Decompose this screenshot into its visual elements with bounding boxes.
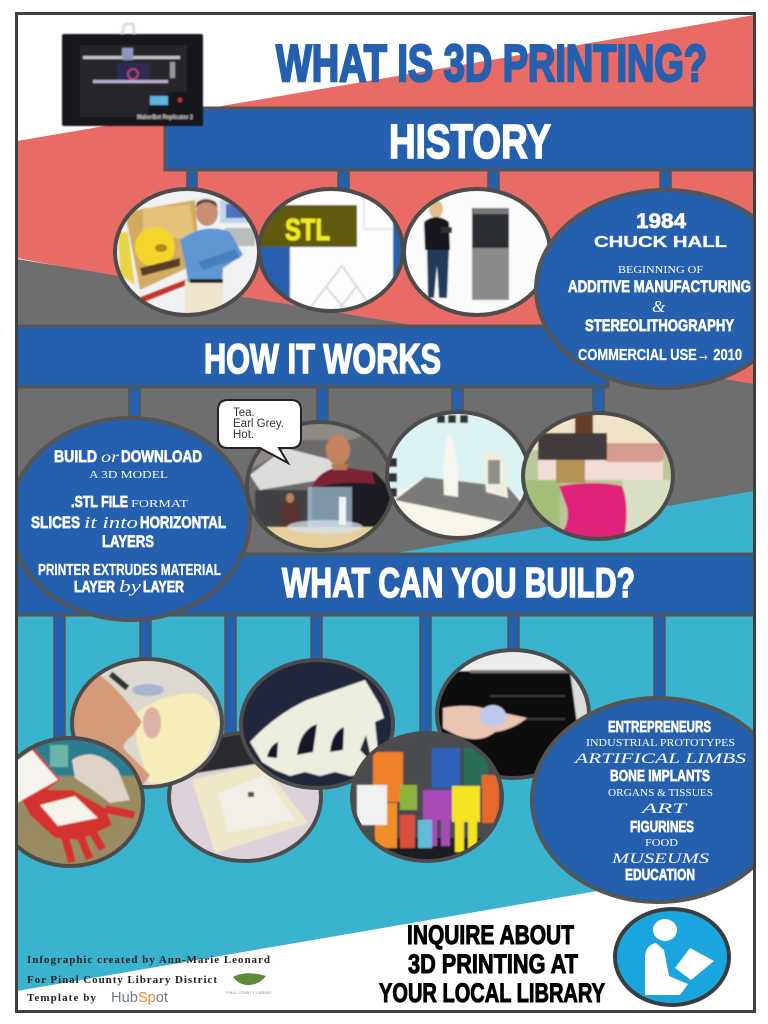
- text: layer by layer: LAYER: [143, 579, 184, 596]
- photo outline: [247, 422, 393, 550]
- panel: what can you build heading bar: [5, 554, 765, 615]
- text: stl file format: .STL FILE: [71, 494, 128, 511]
- year: 1984: [636, 210, 686, 233]
- name: CHUCK HALL: [594, 234, 727, 251]
- photo outline: [404, 189, 550, 315]
- text: stl file format: FORMAT: [131, 498, 188, 510]
- photo outline: [352, 733, 502, 861]
- list item: BONE IMPLANTS: [610, 768, 710, 785]
- photo outline: [259, 189, 403, 311]
- photo: Chuck Hull with printed part: [113, 187, 260, 317]
- text: stl file format: [72, 496, 188, 508]
- photo outline: [437, 650, 589, 778]
- credits: [27, 954, 270, 1006]
- icon: 3D printer photo: MakerBot Replicator 2: [137, 115, 194, 121]
- call to action: YOUR LOCAL LIBRARY: [379, 978, 605, 1008]
- heading: how it works: HOW IT WORKS: [204, 335, 441, 382]
- text: speech: Tea.: [233, 407, 255, 419]
- panel: what you can build list: [532, 698, 768, 902]
- photo: Captain Picard with replicator hologram: [245, 420, 400, 557]
- text: slices it into horizontal: [31, 516, 226, 528]
- photo outline: [241, 660, 393, 788]
- how it works connectors: [129, 387, 604, 425]
- text: beginning of: BEGINNING OF: [618, 264, 703, 276]
- text: speech: Hot.: [233, 429, 254, 441]
- call to action: INQUIRE ABOUT: [407, 920, 574, 950]
- photo outline: [169, 733, 321, 861]
- call to action: 3D PRINTING AT: [408, 949, 578, 979]
- text: layer by layer: LAYER: [74, 579, 115, 596]
- callout: speech bubble: [218, 400, 301, 463]
- credits: HubSpot: [111, 989, 169, 1006]
- photo: colourful printed robots: [350, 731, 506, 863]
- photo outline: [387, 412, 529, 538]
- text: build or download: [54, 450, 202, 462]
- text: layer by layer: by: [119, 577, 142, 596]
- icon: library reader: [615, 909, 729, 1005]
- photo: printed jaw bone: [240, 658, 398, 790]
- photo outline: [115, 189, 259, 315]
- text: slices it into horizontal: HORIZONTAL: [140, 513, 226, 532]
- history connectors: [187, 170, 671, 198]
- photo: slicing software view: [384, 410, 534, 544]
- credits: Template by: [27, 992, 96, 1004]
- credits: For Pinal County Library District: [27, 974, 217, 986]
- photo: printed prosthetic hand: [18, 736, 145, 868]
- text: a 3D model: A 3D MODEL: [89, 470, 168, 481]
- icon: library district logo: PINAL COUNTY LIBRARY: [226, 991, 273, 995]
- list item: FOOD: [645, 837, 678, 849]
- list item: MUSEUMS: [611, 851, 710, 867]
- text: layers: LAYERS: [102, 532, 154, 551]
- list item: ORGANS & TISSUES: [608, 787, 713, 799]
- text: slices it into horizontal: it into: [84, 513, 138, 532]
- list item: ARTIFICAL LIMBS: [574, 751, 747, 767]
- list item: ART: [640, 801, 689, 817]
- what can you build connectors: [54, 615, 665, 743]
- text: printer extrudes material: PRINTER EXTRUDES MATERIAL: [38, 562, 221, 579]
- list item: ENTREPRENEURS: [608, 719, 711, 736]
- photo outline: [0, 738, 143, 866]
- photo: printed skull in hand: [436, 647, 594, 779]
- photo: extruder printing pink object: [522, 410, 677, 545]
- call to action: [379, 920, 605, 1008]
- text: speech: Earl Grey.: [233, 418, 284, 430]
- photo: STL file icon: [255, 185, 410, 315]
- photo: woman with 3D printer: [400, 185, 555, 320]
- photo: STL file icon: STL: [285, 212, 330, 247]
- panel: history heading bar: [165, 108, 765, 170]
- text: build or download: DOWNLOAD: [121, 447, 202, 466]
- list item: FIGURINES: [630, 819, 694, 836]
- heading: history: HISTORY: [389, 116, 551, 169]
- panel: how it works heading bar: [5, 326, 608, 387]
- list item: INDUSTRIAL PROTOTYPES: [586, 737, 735, 749]
- panel: how it works steps: [10, 418, 250, 620]
- photo outline: [72, 659, 222, 787]
- text: slices it into horizontal: SLICES: [31, 513, 80, 532]
- text: ampersand: &: [652, 297, 666, 316]
- text: build or download: or: [101, 449, 120, 466]
- text: build or download: BUILD: [54, 447, 97, 466]
- panel: 1984 Chuck Hall facts: [536, 190, 768, 388]
- photo: prosthetic model in hands: [70, 658, 226, 790]
- photo: printed tissue scaffold: [168, 731, 326, 863]
- credits: Infographic created by Ann-Marie Leonard: [27, 954, 270, 966]
- photo outline: [523, 413, 673, 539]
- icon: 3D printer photo: [62, 24, 203, 126]
- list item: EDUCATION: [625, 867, 695, 884]
- text: layer by layer: [74, 580, 184, 596]
- icon: library district logo: [226, 973, 273, 995]
- heading: what can you build: WHAT CAN YOU BUILD?: [282, 559, 635, 606]
